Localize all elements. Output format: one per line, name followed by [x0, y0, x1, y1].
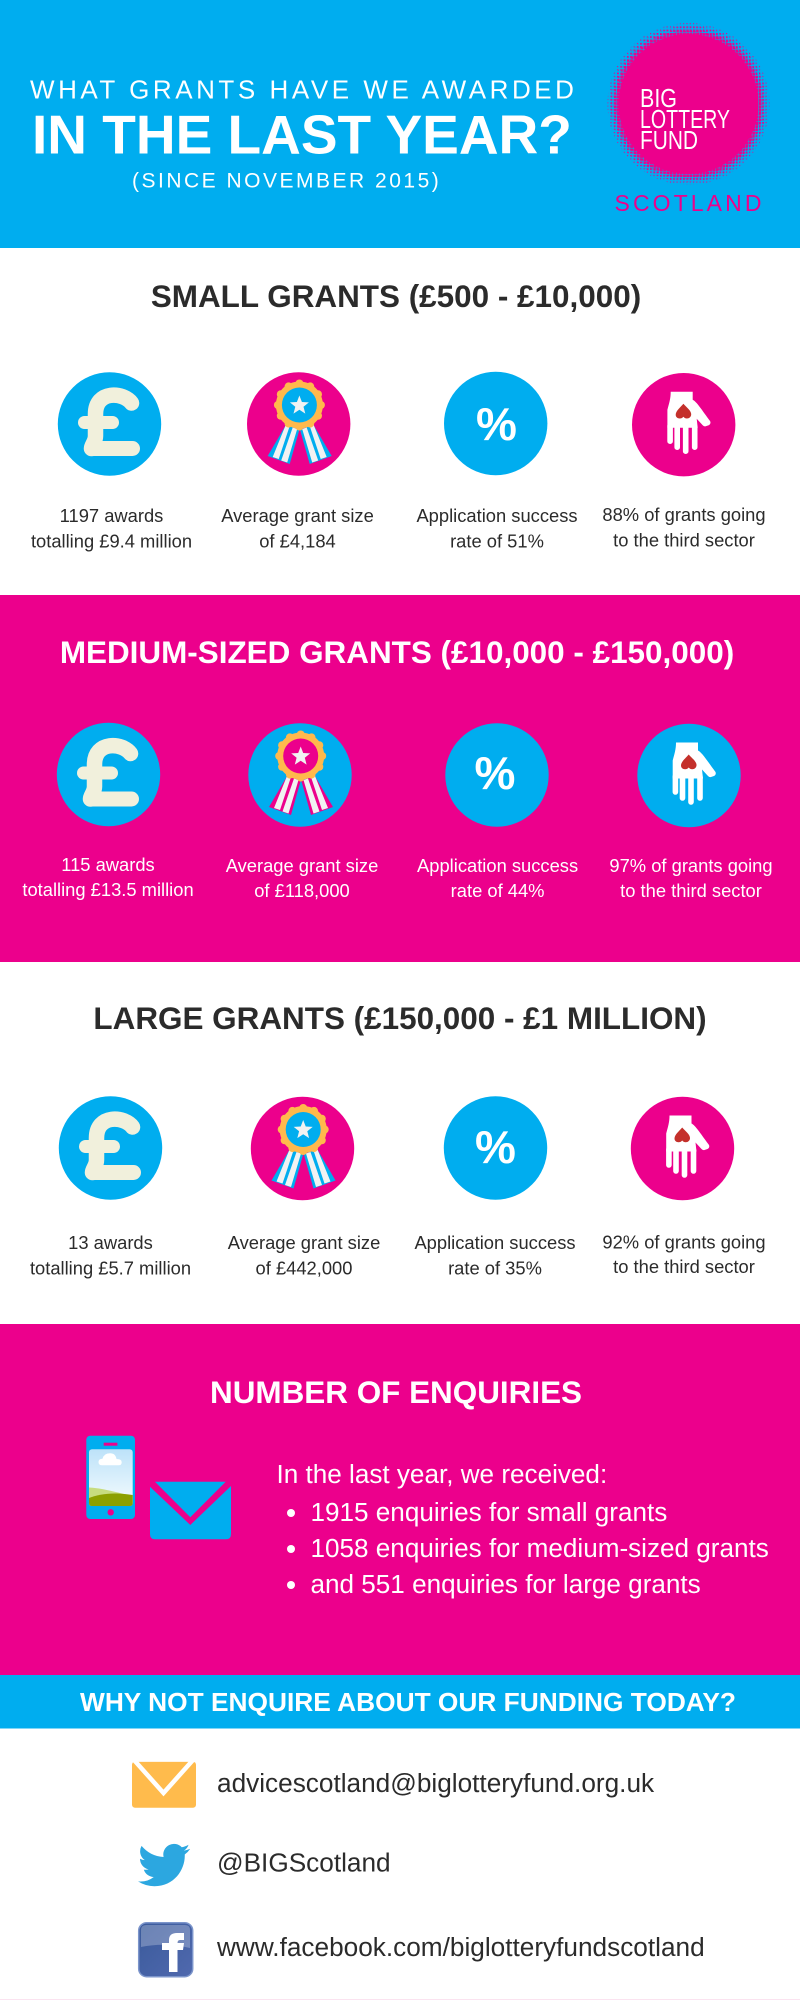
icon: hand with heart — [632, 373, 735, 476]
caption: success rate: Application success — [417, 855, 578, 876]
caption: third sector: 92% of grants going — [602, 1232, 766, 1252]
icon: percent — [444, 1096, 547, 1200]
caption: success rate: rate of 51% — [450, 531, 544, 552]
text block: enquiry counts: In the last year, we received: — [276, 1459, 607, 1489]
icon: pound — [58, 372, 161, 476]
icon: pound — [59, 1096, 162, 1200]
icon: rosette — [251, 1097, 354, 1200]
subtitle: since november 2015: (SINCE NOVEMBER 2015) — [132, 170, 441, 192]
text block: enquiry counts: 1058 enquiries for medium-sized grants — [310, 1533, 769, 1563]
banner: enquire today — [0, 1675, 800, 1728]
icon: percent: % — [475, 1121, 516, 1173]
text block: enquiry counts: 1915 enquiries for small grants — [310, 1497, 667, 1527]
caption: average size: Average grant size — [226, 855, 378, 876]
caption: success rate: Application success — [414, 1232, 576, 1253]
caption: average size: Average grant size — [221, 505, 374, 526]
caption: success rate: rate of 35% — [448, 1258, 542, 1278]
panel: medium grants — [0, 595, 800, 962]
text block: enquiry counts — [276, 1459, 769, 1599]
caption: average size: Average grant size — [228, 1232, 380, 1253]
logo: Big Lottery Fund: LOTTERY — [640, 104, 730, 134]
caption: average size: of £118,000 — [254, 880, 350, 901]
caption: third sector: to the third sector — [620, 880, 762, 901]
caption: third sector: to the third sector — [613, 1256, 755, 1277]
caption: awards: 1197 awards — [60, 505, 163, 526]
logo: Big Lottery Fund — [608, 23, 770, 185]
caption: awards: totalling £5.7 million — [30, 1258, 191, 1278]
heading: large grants: LARGE GRANTS (£150,000 - £1 MILLION) — [93, 1001, 707, 1036]
icon: hand with heart — [637, 724, 741, 827]
panel: contact details — [130, 1756, 705, 1977]
caption: success rate: rate of 44% — [451, 880, 545, 901]
panel: header — [0, 0, 800, 248]
icon: pound — [57, 723, 160, 826]
heading: small grants: SMALL GRANTS (£500 - £10,000) — [151, 279, 641, 314]
icon: rosette — [248, 723, 352, 827]
contact: twitter handle: @BIGScotland — [217, 1848, 391, 1878]
logo: Big Lottery Fund: FUND — [640, 125, 698, 155]
icon: envelope — [150, 1482, 231, 1539]
caption: average size: of £442,000 — [256, 1258, 352, 1278]
contact: facebook url: www.facebook.com/biglotteryfundscotland — [216, 1932, 705, 1962]
icon: twitter bird — [138, 1844, 190, 1886]
icon: percent — [445, 723, 549, 827]
text block: enquiry counts: and 551 enquiries for large grants — [310, 1569, 701, 1599]
panel: large grants — [0, 962, 800, 1324]
caption: third sector: 97% of grants going — [609, 855, 773, 876]
caption: third sector: 88% of grants going — [602, 504, 766, 525]
heading: number of enquiries: NUMBER OF ENQUIRIES — [210, 1375, 582, 1410]
title: what grants have we awarded: WHAT GRANTS HAVE WE AWARDED — [30, 74, 578, 104]
icon: hand with heart — [631, 1097, 734, 1200]
caption: awards: totalling £13.5 million — [22, 879, 194, 900]
icon: facebook — [139, 1923, 193, 1977]
title: in the last year: IN THE LAST YEAR? — [32, 104, 572, 166]
caption: third sector: to the third sector — [613, 530, 755, 551]
caption: awards: 13 awards — [68, 1232, 153, 1253]
icon: percent — [444, 372, 547, 475]
caption: average size: of £4,184 — [259, 531, 336, 552]
icon: phone — [86, 1436, 135, 1519]
icon: rosette — [247, 372, 350, 476]
heading: medium grants: MEDIUM-SIZED GRANTS (£10,000 - £150,000) — [60, 635, 734, 670]
caption: success rate: Application success — [416, 505, 578, 526]
caption: awards: 115 awards — [61, 854, 155, 875]
panel: number of enquiries — [0, 1324, 800, 1675]
panel: small grants — [0, 248, 800, 595]
icon: email — [130, 1756, 198, 1808]
icon: percent: % — [475, 747, 515, 799]
banner: enquire today: WHY NOT ENQUIRE ABOUT OUR FUNDING TODAY? — [80, 1687, 736, 1717]
icon: percent: % — [476, 398, 517, 450]
contact: email address: advicescotland@biglotteryfund.org.uk — [217, 1768, 655, 1798]
logo: Big Lottery Fund: BIG — [640, 83, 677, 113]
logo caption: Scotland: SCOTLAND — [614, 190, 765, 216]
caption: awards: totalling £9.4 million — [31, 531, 192, 552]
